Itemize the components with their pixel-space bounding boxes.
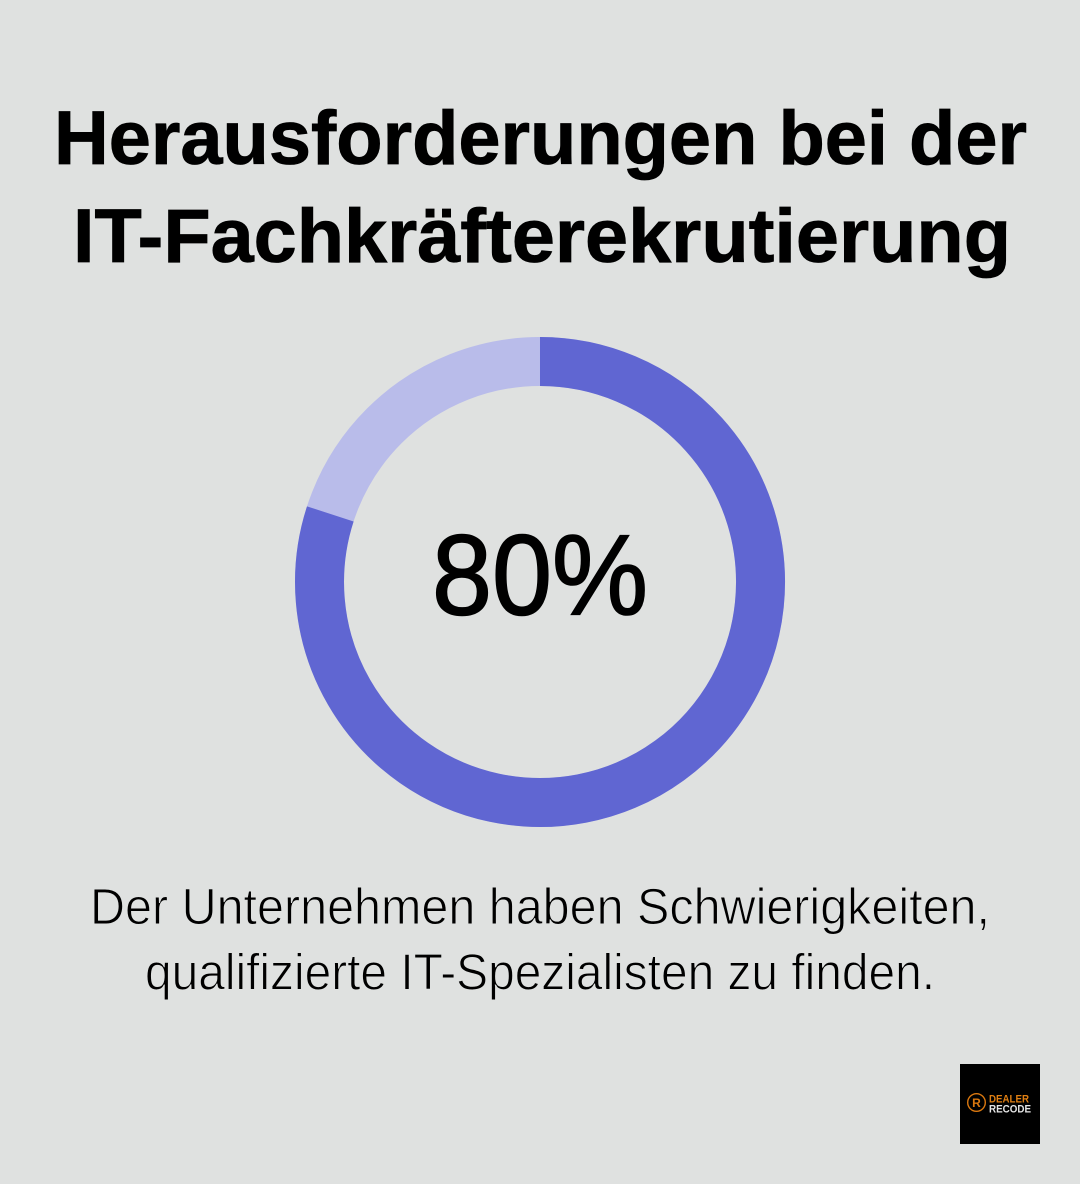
center value: 80%	[432, 512, 648, 640]
logo wordmark: DEALER	[989, 1094, 1029, 1106]
logo: Dealer Recode	[960, 1064, 1040, 1144]
title	[54, 96, 1027, 279]
icon: logo R ring: R	[972, 1096, 981, 1110]
caption: qualifizierte IT-Spezialisten zu finden.	[145, 944, 935, 1000]
logo wordmark: RECODE	[989, 1103, 1031, 1115]
title: Herausforderungen bei der	[54, 96, 1027, 181]
logo wordmark	[989, 1094, 1031, 1115]
title: IT-Fachkräfterekrutierung	[73, 194, 1011, 279]
donut chart: 80 percent	[320, 362, 761, 802]
caption: Der Unternehmen haben Schwierigkeiten,	[90, 878, 990, 935]
caption	[90, 878, 990, 1000]
